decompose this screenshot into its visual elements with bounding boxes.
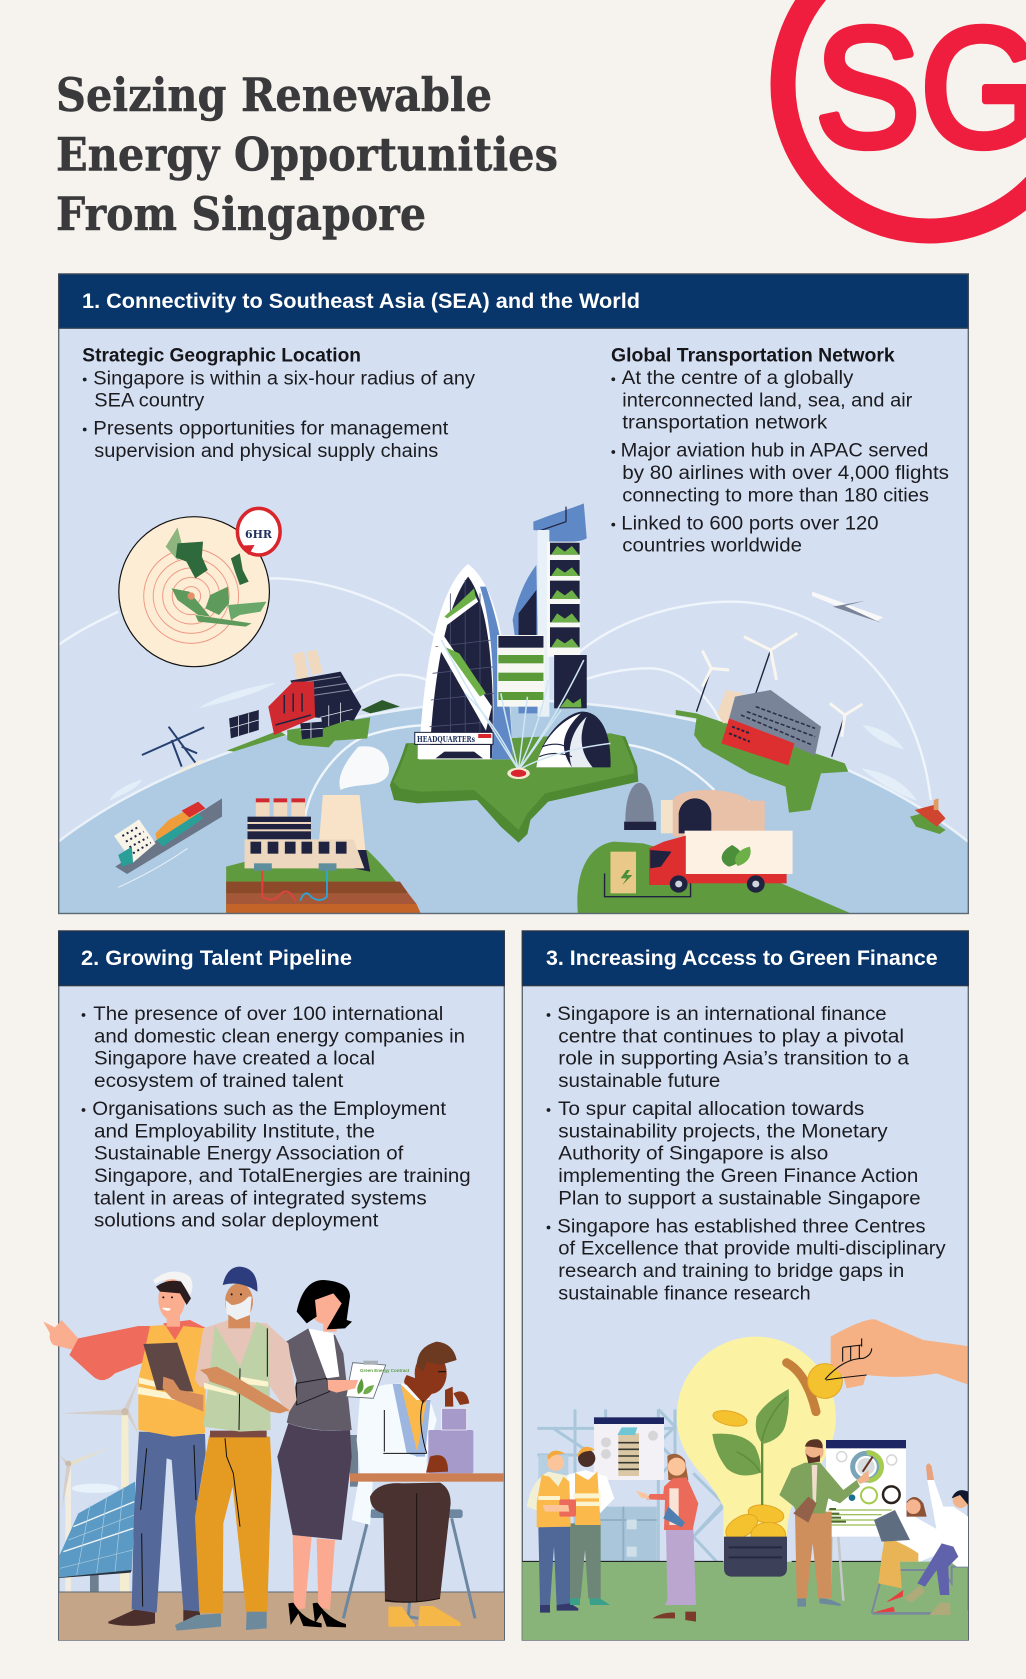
text: strategic geographic location: Strategic Geographic Location — [82, 346, 361, 367]
title: Seizing Renewable — [56, 68, 492, 122]
globe — [58, 700, 968, 913]
panel 3 illustration — [522, 1319, 969, 1640]
factory island left — [227, 650, 400, 752]
text: global transportation network: Major aviation hub in APAC served — [621, 441, 928, 462]
route arcs — [58, 578, 931, 817]
text: strategic geographic location: supervision and physical supply chains — [94, 441, 438, 462]
panel 3 body text: of Excellence that provide multi-disciplinary — [558, 1239, 946, 1260]
seated audience — [872, 1463, 969, 1615]
clouds — [109, 683, 917, 801]
sprout — [712, 1389, 789, 1505]
headquarters label: HEADQUARTERs — [417, 735, 475, 745]
panel 1: connectivity — [58, 274, 968, 914]
plane — [812, 592, 883, 623]
right island with factory — [676, 690, 848, 813]
workers at left — [527, 1447, 614, 1613]
panel 2 body text: talent in areas of integrated systems — [94, 1188, 427, 1209]
signal fan lines — [441, 640, 610, 770]
text: global transportation network: interconnected land, sea, and air — [622, 390, 913, 411]
panel 1 header: 1. Connectivity to Southeast Asia (SEA) and the World — [82, 290, 640, 313]
coins pile and pot — [712, 1408, 787, 1577]
worker with hard hat and tablet — [43, 1272, 207, 1626]
panel 2 body text — [82, 1004, 471, 1232]
panel 3 body text: sustainable future — [558, 1071, 720, 1092]
panel 3 body text: Plan to support a sustainable Singapore — [558, 1188, 921, 1209]
panel 3 body text: research and training to bridge gaps in — [558, 1261, 904, 1282]
hand dropping coin — [808, 1319, 967, 1398]
text: global transportation network: connecting to more than 180 cities — [622, 485, 929, 506]
panel 2 body text: Sustainable Energy Association of — [94, 1144, 404, 1165]
panel 2 body text: Organisations such as the Employment — [92, 1099, 447, 1120]
text: strategic geographic location: Singapore is within a six-hour radius of any — [93, 368, 476, 389]
text: global transportation network: transportation network — [622, 413, 828, 434]
panel 3 body text: centre that continues to play a pivotal — [558, 1026, 904, 1047]
panel 2 body text: solutions and solar deployment — [94, 1211, 379, 1232]
title: Energy Opportunities — [56, 128, 558, 182]
hub marker — [507, 768, 530, 779]
construction info board — [594, 1417, 664, 1480]
panel 1 header — [59, 274, 968, 328]
headquarters sign — [415, 732, 493, 744]
text: global transportation network: countries worldwide — [622, 536, 802, 557]
panel 2 body text: and Employability Institute, the — [94, 1121, 375, 1142]
panel 3 body text: implementing the Green Finance Action — [558, 1166, 918, 1187]
6HR badge — [237, 508, 280, 555]
panel 2 header: 2. Growing Talent Pipeline — [81, 947, 352, 970]
panel 3: green finance — [522, 931, 969, 1640]
container ship — [114, 798, 222, 887]
panel 2 body text: ecosystem of trained talent — [94, 1071, 344, 1092]
panel 3 header: 3. Increasing Access to Green Finance — [546, 947, 938, 970]
panel 3 body text: Singapore has established three Centres — [557, 1216, 926, 1237]
panel 2: growing talent pipeline — [43, 931, 504, 1641]
title — [56, 68, 558, 241]
small island with ship — [910, 798, 946, 834]
logo: SG roundel — [783, 0, 1026, 231]
presenter and chart board — [779, 1439, 906, 1607]
map globe inset — [119, 517, 269, 667]
panel 3 body text: Authority of Singapore is also — [558, 1144, 828, 1165]
panel 2 body text: Singapore have created a local — [94, 1049, 375, 1070]
port crane — [142, 727, 204, 772]
headquarters towers — [418, 503, 611, 767]
panel 3 body text: role in supporting Asia’s transition to a — [558, 1049, 909, 1070]
text: global transportation network: by 80 airlines with over 4,000 flights — [622, 463, 949, 484]
text: global transportation network — [611, 346, 949, 557]
panel 2 background: turbines, solar and ground — [59, 1380, 504, 1641]
scientist at lab bench — [343, 1342, 503, 1627]
panel 3 body text: To spur capital allocation towards — [558, 1099, 864, 1120]
panel 1 outline — [59, 274, 968, 914]
6HR label: 6HR — [245, 527, 272, 541]
panel 1 illustration: Singapore hub and global network — [58, 503, 968, 913]
text: strategic geographic location: SEA country — [94, 391, 205, 412]
panel 2 body text: The presence of over 100 international — [93, 1004, 443, 1025]
text: global transportation network: Global Transportation Network — [611, 346, 895, 367]
light bulb — [677, 1337, 836, 1537]
panel 3 header — [522, 931, 968, 986]
panel 3 body text: sustainable finance research — [558, 1283, 811, 1304]
scaffolding and ground — [522, 1409, 968, 1640]
woman with clipboard — [277, 1280, 386, 1627]
text: strategic geographic location — [82, 346, 476, 462]
panel 3 body text: Singapore is an international finance — [557, 1004, 887, 1025]
geothermal power plant — [226, 746, 421, 913]
text: global transportation network: At the centre of a globally — [622, 368, 854, 389]
wind turbines — [696, 633, 863, 757]
businesswoman — [636, 1454, 698, 1622]
panel 3 body text — [547, 1004, 946, 1304]
text: global transportation network: Linked to 600 ports over 120 — [621, 513, 879, 534]
panel 2 body text: Singapore, and TotalEnergies are training — [94, 1166, 471, 1187]
title: From Singapore — [56, 187, 426, 241]
older worker with vest — [175, 1267, 297, 1631]
people group — [43, 1267, 503, 1631]
charging station and truck — [577, 783, 851, 913]
panel 2 header — [59, 931, 504, 986]
panel 3 body text: sustainability projects, the Monetary — [558, 1121, 888, 1142]
Singapore island — [390, 733, 638, 843]
lever — [787, 1363, 816, 1412]
panel 2 body text: and domestic clean energy companies in — [94, 1026, 465, 1047]
clipboard caption: Green Energy Contract — [360, 1368, 410, 1373]
text: strategic geographic location: Presents opportunities for management — [93, 418, 449, 439]
